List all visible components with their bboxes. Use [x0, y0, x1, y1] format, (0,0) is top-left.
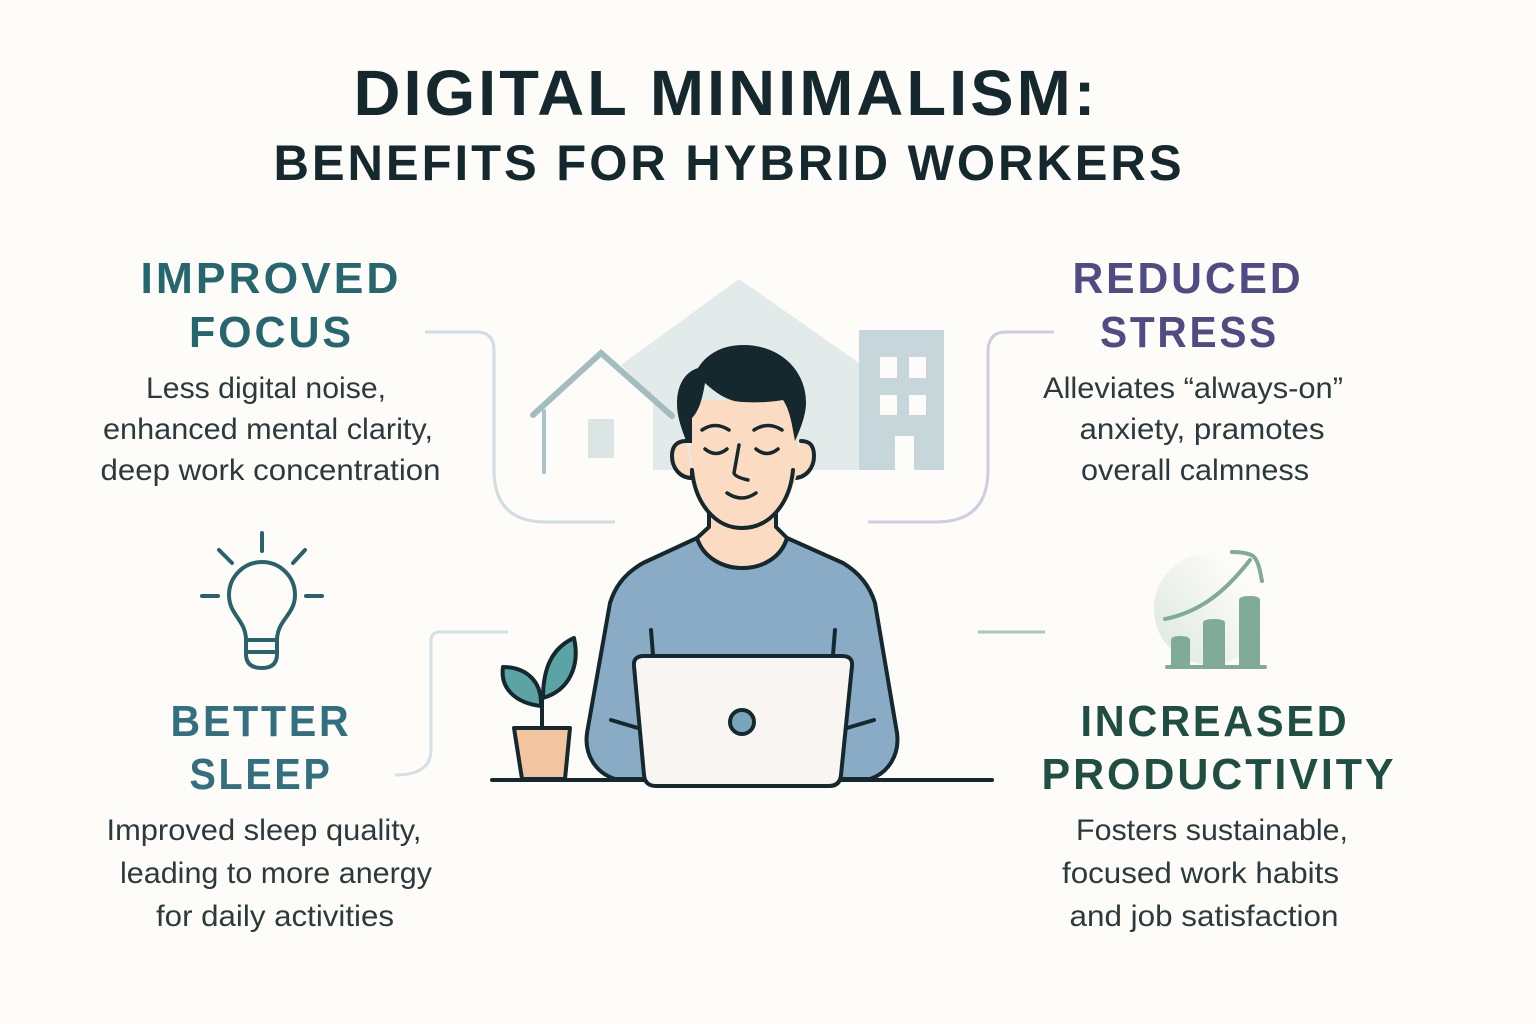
person: neck — [697, 505, 787, 568]
panel: improved focus: Less digital noise, — [146, 372, 386, 405]
panel: improved focus: IMPROVED — [140, 254, 402, 303]
person: jaw outline — [692, 470, 793, 528]
person: arm lines — [611, 630, 874, 728]
icon: house — [533, 353, 672, 472]
illustration: person at laptop — [587, 345, 897, 779]
connector: increased productivity — [978, 630, 1045, 634]
icon: growth chart — [1154, 552, 1266, 667]
icon: potted plant — [503, 638, 576, 779]
panel: improved focus — [100, 254, 440, 487]
panel: increased productivity: PRODUCTIVITY — [1042, 750, 1396, 799]
panel: reduced stress: STRESS — [1100, 308, 1279, 357]
panel: increased productivity: Fosters sustainable, — [1076, 814, 1348, 847]
panel: improved focus: FOCUS — [189, 308, 354, 357]
connector: better sleep — [395, 632, 508, 775]
panel: better sleep — [106, 697, 432, 933]
panel: reduced stress — [1043, 254, 1343, 487]
panel: better sleep: leading to more anergy — [120, 857, 432, 890]
title: DIGITAL MINIMALISM: — [354, 57, 1098, 129]
icon: office and roof background — [621, 279, 944, 471]
panel: reduced stress: anxiety, pramotes — [1080, 413, 1324, 446]
panel: increased productivity: INCREASED — [1080, 697, 1350, 746]
panel: improved focus: enhanced mental clarity, — [103, 413, 433, 446]
panel: improved focus: deep work concentration — [100, 454, 440, 487]
person: eyebrows, eyes, nose, mouth — [702, 426, 782, 498]
panel: increased productivity: and job satisfaction — [1070, 900, 1338, 933]
laptop — [634, 656, 852, 786]
person: torso — [587, 538, 897, 779]
panel: reduced stress: overall calmness — [1081, 454, 1309, 487]
person: ears — [672, 441, 814, 478]
title: BENEFITS FOR HYBRID WORKERS — [274, 135, 1184, 191]
icon: lightbulb — [202, 533, 322, 668]
title — [274, 57, 1184, 191]
connector: improved focus — [425, 332, 615, 522]
panel: increased productivity — [1042, 697, 1396, 933]
panel: reduced stress: REDUCED — [1072, 254, 1304, 303]
panel: better sleep: for daily activities — [156, 900, 394, 933]
panel: better sleep: Improved sleep quality, — [106, 814, 422, 847]
panel: reduced stress: Alleviates “always-on” — [1043, 372, 1343, 405]
connector: reduced stress — [868, 332, 1054, 522]
panel: better sleep: BETTER — [170, 697, 352, 746]
panel: better sleep: SLEEP — [190, 750, 332, 799]
panel: increased productivity: focused work habits — [1062, 857, 1339, 890]
person: face — [688, 400, 798, 528]
desk line — [492, 778, 992, 782]
person: hair — [677, 345, 806, 443]
person: neck outline — [697, 510, 787, 568]
